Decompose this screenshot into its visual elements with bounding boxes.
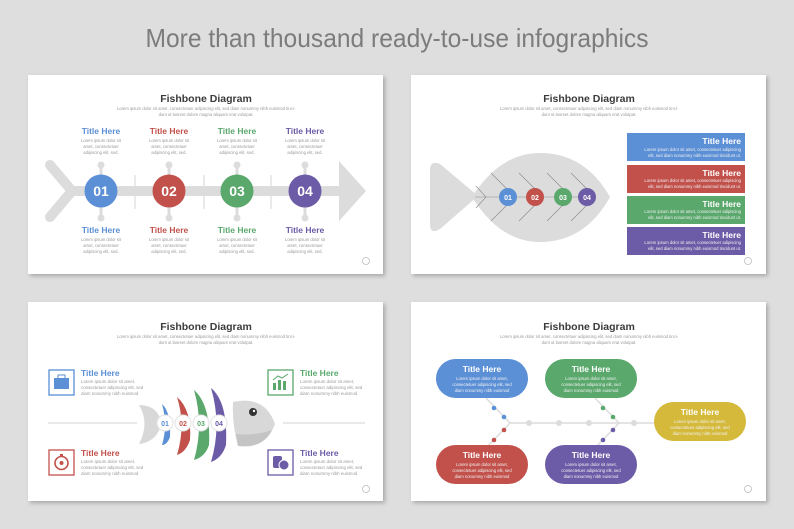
titles and text: Title Here [218,126,257,136]
titles and text: Lorem ipsum dolor sit [217,138,258,143]
text blocks: Title Here [81,368,120,378]
fish shape [430,153,610,242]
panel: slide 4 pill fishbone: Lorem ipsum dolor sit amet, consectetuer adipiscing elit, sed diam nonummy nibh euismod tinci- [500,334,679,339]
titles and text: Lorem ipsum dolor sit [285,237,326,242]
text blocks: Title Here [81,448,120,458]
titles and text: adipiscing elit, sed. [151,249,187,254]
titles and text: Title Here [218,225,257,235]
colored boxes: elit, sed diam nonummy nibh euismod tincidunt ut. [648,215,741,220]
numbered circles [84,174,322,208]
panel: slide 2 fish with boxes: 02 [531,195,539,202]
titles and text: adipiscing elit, sed. [219,150,255,155]
pills: Title Here [572,450,611,460]
colored boxes: Title Here [702,230,741,240]
panel: slide 3 fish skeleton with icons: Lorem ipsum dolor sit amet, [300,459,354,464]
titles and text: amet, consectetuer [83,243,119,248]
panel: slide 3 fish skeleton with icons: consectetuer adipiscing elit, sed [300,465,363,470]
titles and text: amet, consectetuer [151,243,187,248]
icon: coins [268,450,293,475]
pills: Title Here [572,364,611,374]
panel: slide 4 pill fishbone: dunt ut laoreet dolore magna aliquam erat volutpat. [542,340,636,345]
panel: slide 1 horizontal fishbone: dunt ut laoreet dolore magna aliquam erat volutpat. [159,112,253,117]
pills: Title Here [463,450,502,460]
panel: slide 3 fish skeleton with icons: diam nonummy nibh euismod [300,391,358,396]
pills: Lorem ipsum dolor sit amet, [456,462,508,467]
panel: slide 3 fish skeleton with icons [28,302,383,501]
panel: slide 3 fish skeleton with icons: Lorem ipsum dolor sit amet, [300,379,354,384]
fish skeleton: 03 [197,421,205,428]
colored boxes: Lorem ipsum dolor sit amet, consectetuer adipiscing [644,147,742,152]
colored boxes: elit, sed diam nonummy nibh euismod tincidunt ut. [648,153,741,158]
panel: slide 2 fish with boxes: 04 [583,195,591,202]
pills: diam nonummy nibh euismod [455,474,510,479]
titles and text: Lorem ipsum dolor sit [81,138,122,143]
titles and text: adipiscing elit, sed. [151,150,187,155]
numbered circles: 02 [161,183,177,199]
pills: consectetuer adipiscing elit, sed [561,468,621,473]
titles and text: amet, consectetuer [219,243,255,248]
fish skeleton [139,388,275,462]
pills: diam nonummy nibh euismod [564,388,619,393]
colored boxes [627,133,745,255]
pills [436,359,746,484]
colored boxes: elit, sed diam nonummy nibh euismod tincidunt ut. [648,184,741,189]
titles and text: Lorem ipsum dolor sit [285,138,326,143]
titles and text: Lorem ipsum dolor sit [217,237,258,242]
spine arrow [50,161,366,222]
fish skeleton: 01 [161,421,169,428]
panel: slide 2 fish with boxes: 01 [504,195,512,202]
pills: Title Here [681,407,720,417]
titles and text: Title Here [286,225,325,235]
icon: briefcase [49,370,74,395]
colored boxes: Lorem ipsum dolor sit amet, consectetuer adipiscing [644,209,742,214]
titles and text: amet, consectetuer [83,144,119,149]
panel: slide 3 fish skeleton with icons: Lorem ipsum dolor sit amet, consectetuer adipiscing elit, sed diam nonummy nibh euismod tinci- [117,334,296,339]
pills: consectetuer adipiscing elit, sed [670,425,730,430]
panel: slide 1 horizontal fishbone: Fishbone Diagram [160,93,252,105]
pills: Lorem ipsum dolor sit amet, [565,376,617,381]
panel: slide 4 pill fishbone [411,302,766,501]
panel: slide 3 fish skeleton with icons: consectetuer adipiscing elit, sed [300,385,363,390]
panel: slide 3 fish skeleton with icons: diam nonummy nibh euismod [81,471,139,476]
panel: slide 4 pill fishbone: Fishbone Diagram [543,321,635,333]
titles and text: Lorem ipsum dolor sit [149,138,190,143]
titles and text [81,126,326,254]
fish skeleton: 02 [179,421,187,428]
colored boxes: Lorem ipsum dolor sit amet, consectetuer adipiscing [644,178,742,183]
titles and text: adipiscing elit, sed. [83,150,119,155]
titles and text: amet, consectetuer [151,144,187,149]
titles and text: Title Here [286,126,325,136]
panel: slide 2 fish with boxes: Lorem ipsum dolor sit amet, consectetuer adipiscing elit, sed diam nonummy nibh euismod tinci- [500,106,679,111]
numbered circles: 01 [93,183,109,199]
pills: Lorem ipsum dolor sit amet, [456,376,508,381]
titles and text: amet, consectetuer [287,144,323,149]
colored boxes: Title Here [702,199,741,209]
titles and text: Title Here [150,225,189,235]
panel: slide 3 fish skeleton with icons: Lorem ipsum dolor sit amet, [81,459,135,464]
pills: consectetuer adipiscing elit, sed [452,382,512,387]
titles and text: adipiscing elit, sed. [287,249,323,254]
text blocks [81,368,339,458]
panel: slide 3 fish skeleton with icons: Lorem ipsum dolor sit amet, [81,379,135,384]
pills: diam nonummy nibh euismod [455,388,510,393]
pills: Lorem ipsum dolor sit amet, [565,462,617,467]
titles and text: Title Here [82,225,121,235]
panel: slide 3 fish skeleton with icons: dunt ut laoreet dolore magna aliquam erat volutpat. [159,340,253,345]
panel: slide 3 fish skeleton with icons: diam nonummy nibh euismod [81,391,139,396]
titles and text: adipiscing elit, sed. [287,150,323,155]
titles and text: Lorem ipsum dolor sit [149,237,190,242]
text blocks: Title Here [300,368,339,378]
panel: slide 1 horizontal fishbone: Lorem ipsum dolor sit amet, consectetuer adipiscing elit, sed diam nonummy nibh euismod tinci- [117,106,296,111]
pills: consectetuer adipiscing elit, sed [452,468,512,473]
panel: slide 3 fish skeleton with icons: consectetuer adipiscing elit, sed [81,385,144,390]
panel: slide 2 fish with boxes [411,75,766,274]
icon: chart [268,370,293,395]
panel: slide 3 fish skeleton with icons: Fishbone Diagram [160,321,252,333]
colored boxes: Title Here [702,168,741,178]
colored boxes: Title Here [702,136,741,146]
panel: slide 2 fish with boxes: 03 [559,195,567,202]
main heading: More than thousand ready-to-use infographics [146,23,648,53]
pills: consectetuer adipiscing elit, sed [561,382,621,387]
spine and bones [486,398,656,448]
panel: slide 3 fish skeleton with icons: diam nonummy nibh euismod [300,471,358,476]
pills: Lorem ipsum dolor sit amet, [674,419,726,424]
colored boxes: Lorem ipsum dolor sit amet, consectetuer adipiscing [644,240,742,245]
colored boxes: elit, sed diam nonummy nibh euismod tincidunt ut. [648,246,741,251]
titles and text: Lorem ipsum dolor sit [81,237,122,242]
numbered circles: 04 [297,183,313,199]
titles and text: amet, consectetuer [287,243,323,248]
pills: Title Here [463,364,502,374]
titles and text: amet, consectetuer [219,144,255,149]
titles and text: adipiscing elit, sed. [83,249,119,254]
numbered circles: 03 [229,183,245,199]
panel: slide 2 fish with boxes: Fishbone Diagram [543,93,635,105]
pills: diam nonummy nibh euismod [564,474,619,479]
fish skeleton: 04 [215,421,223,428]
titles and text: adipiscing elit, sed. [219,249,255,254]
pills: diam nonummy nibh euismod [673,431,728,436]
text blocks: Title Here [300,448,339,458]
titles and text: Title Here [150,126,189,136]
panel: slide 2 fish with boxes: dunt ut laoreet dolore magna aliquam erat volutpat. [542,112,636,117]
panel: slide 1 horizontal fishbone [28,75,383,274]
panel: slide 3 fish skeleton with icons: consectetuer adipiscing elit, sed [81,465,144,470]
icon: stopwatch [49,450,74,475]
titles and text: Title Here [82,126,121,136]
